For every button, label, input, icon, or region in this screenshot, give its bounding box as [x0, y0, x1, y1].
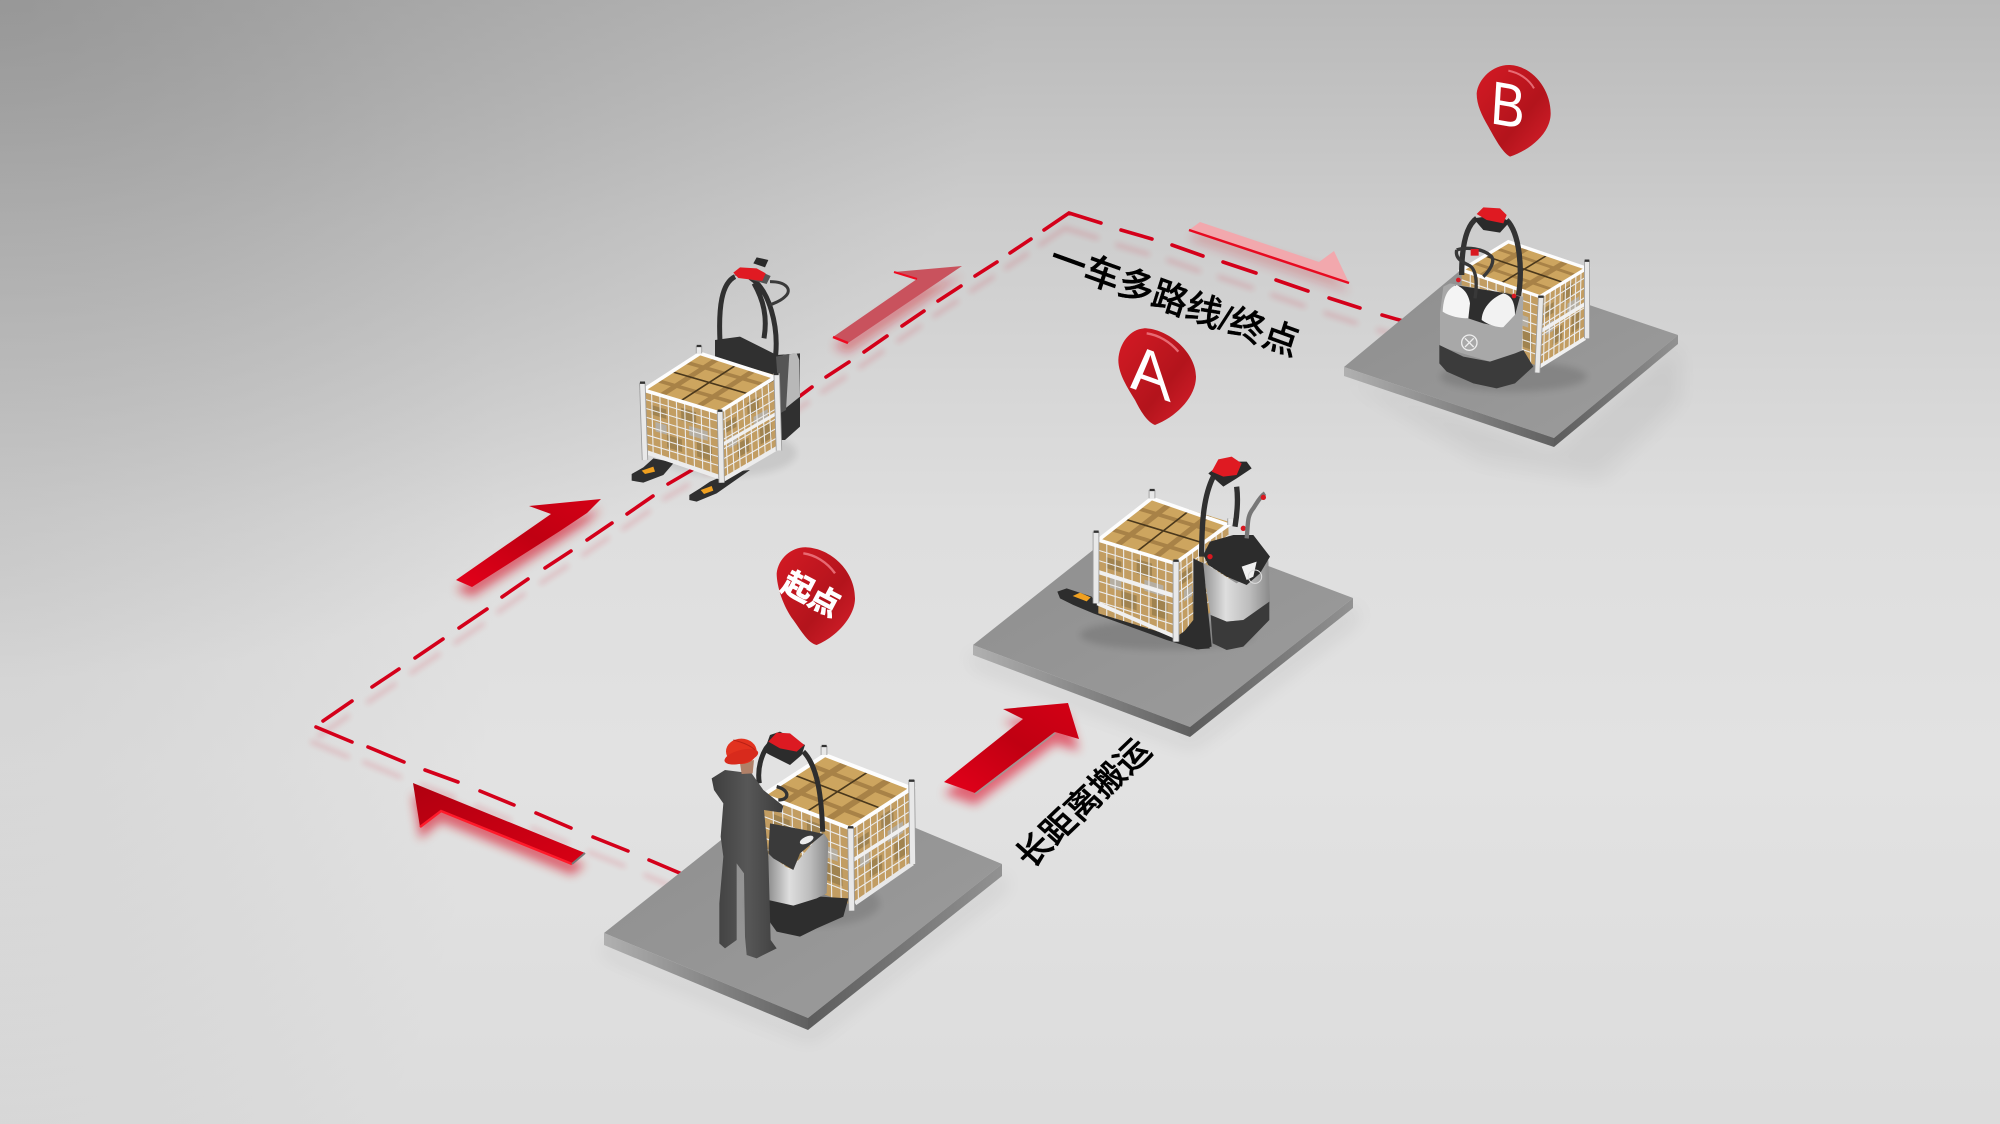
cargo cage — [763, 746, 914, 911]
tiller mast — [759, 732, 823, 832]
mast — [1462, 207, 1520, 297]
truck silver body — [768, 833, 828, 906]
ground shadow — [1440, 362, 1587, 392]
platform: B — [1344, 264, 1680, 480]
pin label: B — [1489, 69, 1527, 143]
control deck — [768, 823, 823, 870]
pin: start — [777, 547, 855, 645]
truck body — [1439, 283, 1533, 388]
platform: start — [602, 779, 1006, 1038]
dashed route — [316, 213, 1403, 874]
tiller handle — [1247, 493, 1266, 538]
pin: B — [1477, 65, 1551, 157]
pin label: 起点 — [777, 566, 845, 624]
route reflection — [312, 228, 1399, 889]
logo sticker — [799, 834, 815, 846]
arrow: up left leg — [456, 499, 601, 597]
mast and tiller — [720, 257, 788, 355]
pin: A — [1118, 328, 1196, 425]
cargo cage — [640, 346, 779, 483]
truck base — [768, 897, 848, 937]
truck body — [715, 337, 800, 440]
ground shadow — [747, 880, 880, 927]
platform: A — [970, 516, 1358, 746]
truck body — [1180, 526, 1270, 650]
label: one vehicle multiple routes: 一车多路线/终点 — [1046, 236, 1304, 364]
fork — [1057, 588, 1210, 649]
cargo cage — [1094, 490, 1231, 642]
label: long distance transport: 长距离搬运 — [1008, 732, 1159, 875]
tiller handle — [1456, 248, 1516, 298]
cargo cage — [1462, 242, 1589, 373]
ground shadow — [657, 430, 797, 477]
arrow: toward A — [944, 703, 1079, 805]
pin label: A — [1130, 329, 1171, 417]
forks — [632, 458, 750, 502]
forklift with operator: start — [712, 732, 914, 958]
arrow: fading up — [833, 266, 962, 353]
logo — [1462, 335, 1477, 350]
arrow: fading down — [1189, 222, 1349, 293]
forklift: moving on route — [632, 257, 800, 502]
ground shadow — [1080, 620, 1253, 650]
forklift: station B — [1439, 207, 1589, 392]
mast — [1202, 457, 1252, 557]
operator — [712, 739, 783, 958]
arrow: return left — [413, 783, 585, 875]
forklift: station A — [1057, 457, 1270, 650]
